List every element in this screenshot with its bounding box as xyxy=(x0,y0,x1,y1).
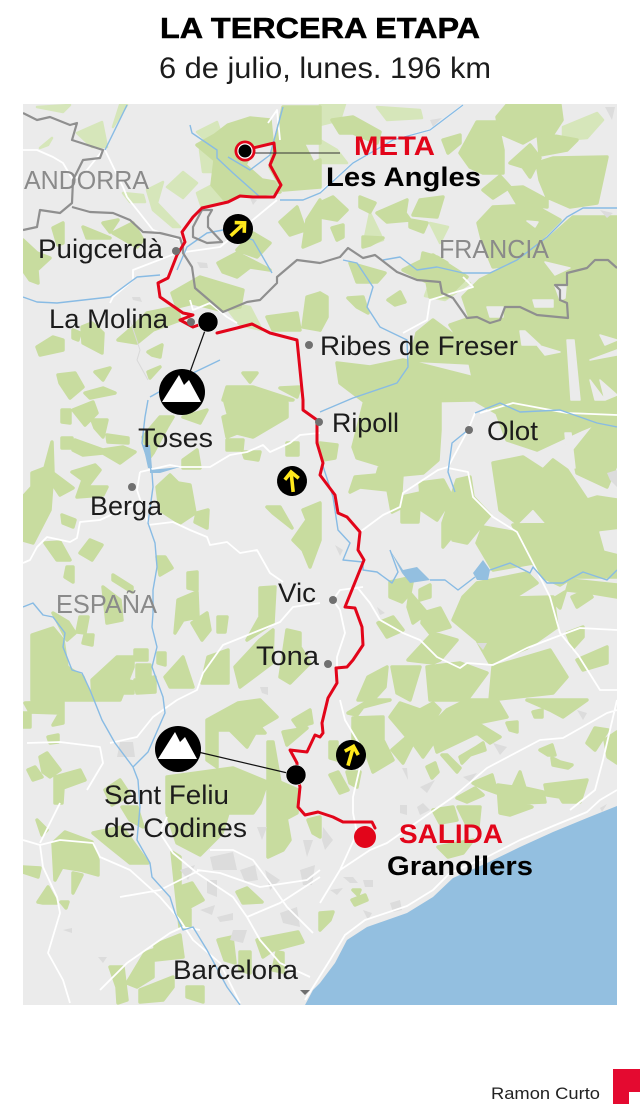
map background xyxy=(23,104,617,1005)
urban areas xyxy=(63,107,617,963)
leader line: Toses xyxy=(190,325,207,372)
leader line: meta xyxy=(245,152,340,154)
sea xyxy=(305,806,617,1005)
climb point: Toses xyxy=(198,312,218,332)
dark urban patch xyxy=(300,990,310,995)
borders xyxy=(23,113,617,323)
roads xyxy=(23,105,617,1003)
label: Tona: Tona xyxy=(256,641,319,671)
map xyxy=(23,104,617,1005)
icon: mountain Toses xyxy=(159,369,205,415)
label: La Molina: La Molina xyxy=(49,304,168,334)
route xyxy=(158,143,375,828)
leader line: Sant Feliu xyxy=(198,752,296,775)
label: Toses: Toses xyxy=(138,423,213,453)
label: ESPAÑA: ESPAÑA xyxy=(56,589,158,619)
icon: finish marker xyxy=(234,140,256,162)
right forest mass xyxy=(450,217,617,460)
label: Olot: Olot xyxy=(487,416,539,446)
label: SALIDA: SALIDA xyxy=(399,819,503,849)
icon: direction arrow middle xyxy=(276,465,308,497)
icon: direction arrow south xyxy=(332,736,370,774)
icon: mountain Sant Feliu xyxy=(155,726,201,772)
label: Granollers: Granollers xyxy=(387,851,533,881)
label: ANDORRA: ANDORRA xyxy=(24,165,150,195)
label: Vic: Vic xyxy=(278,578,316,608)
icon: direction arrow north xyxy=(217,208,259,250)
label: Ripoll: Ripoll xyxy=(332,408,399,438)
author credit: Ramon Curto xyxy=(491,1084,600,1103)
reservoirs xyxy=(143,445,490,583)
city dots xyxy=(128,247,473,668)
clearings in forest xyxy=(487,221,617,553)
label: FRANCIA: FRANCIA xyxy=(439,234,550,264)
label: de Codines: de Codines xyxy=(104,813,247,843)
logo xyxy=(613,1069,640,1104)
rivers xyxy=(23,105,617,1005)
label: META: META xyxy=(354,131,435,161)
label: Berga: Berga xyxy=(90,491,162,521)
label: Puigcerdà: Puigcerdà xyxy=(38,234,163,264)
icon: start marker xyxy=(354,826,376,848)
light vegetation xyxy=(37,104,603,330)
label: Barcelona: Barcelona xyxy=(173,955,298,985)
climb point: Sant Feliu xyxy=(286,765,306,785)
subtitle: 6 de julio, lunes. 196 km xyxy=(159,52,491,85)
label: Sant Feliu: Sant Feliu xyxy=(104,780,229,810)
label: Ribes de Freser: Ribes de Freser xyxy=(320,331,518,361)
title: LA TERCERA ETAPA xyxy=(160,13,480,45)
dense vegetation xyxy=(23,200,320,400)
label: Les Angles: Les Angles xyxy=(326,162,481,192)
